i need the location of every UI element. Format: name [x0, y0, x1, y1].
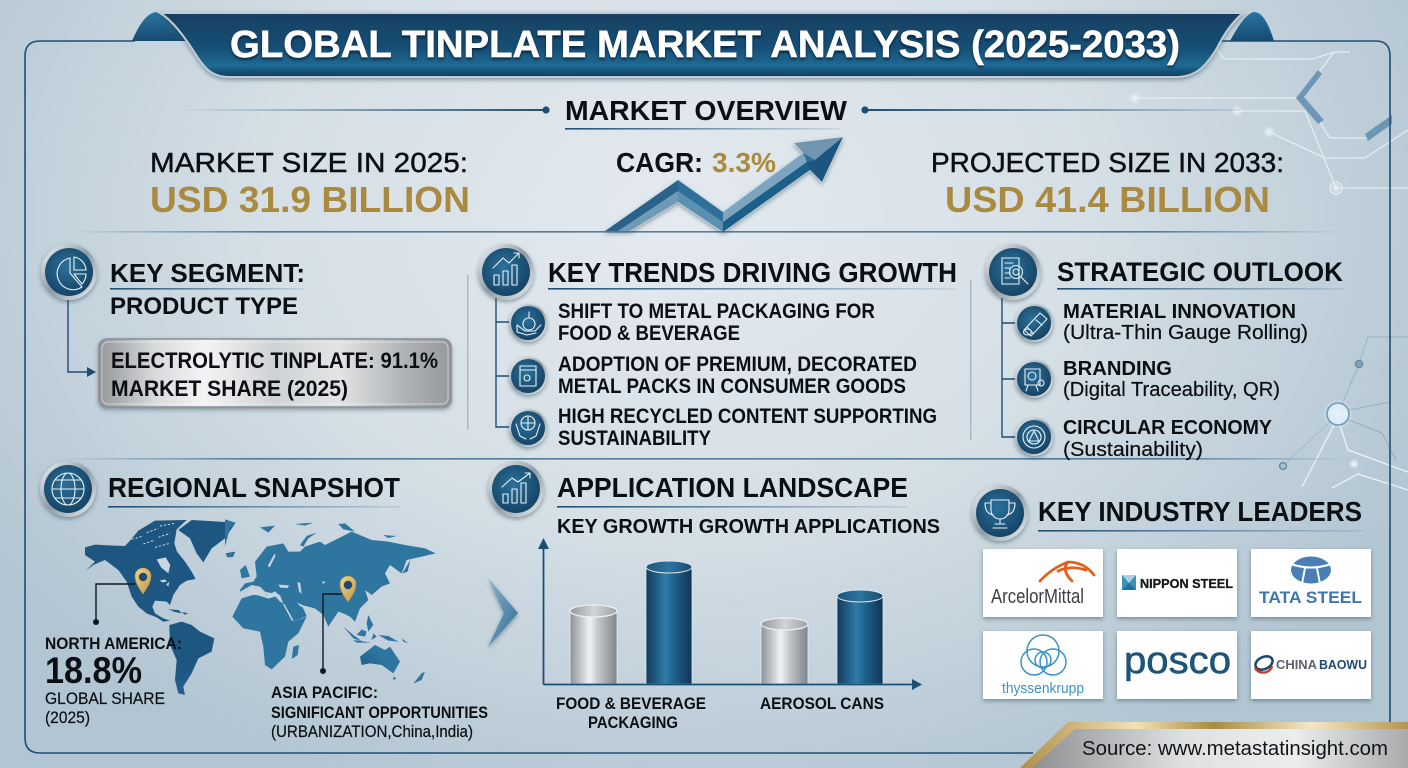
americas and greenland	[85, 520, 236, 695]
arrow: chevron to application panel	[488, 578, 518, 647]
trend text 1: SHIFT TO METAL PACKAGING FOR	[558, 300, 875, 323]
icon: recycling globe in hands	[509, 409, 547, 447]
trend text 3: SUSTAINABILITY	[558, 427, 711, 450]
icon: brand seal	[1015, 360, 1053, 398]
bar: aerosol blue	[837, 590, 883, 684]
logo: Nippon Steel	[1117, 549, 1237, 617]
north america stat: GLOBAL SHARE	[45, 689, 165, 708]
trend text 3	[558, 405, 937, 450]
heading: key segment: KEY SEGMENT:	[110, 258, 305, 288]
stat: projected size 2033	[931, 147, 1284, 220]
panel: key segment	[41, 244, 451, 407]
seas: mediterranean, black, caspian, red, gulf, baltic	[245, 554, 326, 621]
subheading: KEY GROWTH GROWTH APPLICATIONS	[557, 516, 940, 538]
logo: ArcelorMittal	[983, 549, 1103, 617]
icon: decorated pack	[509, 357, 547, 395]
subheading: product type: PRODUCT TYPE	[110, 293, 298, 320]
market overview heading	[180, 95, 1240, 130]
asia pacific stat: SIGNIFICANT OPPORTUNITIES	[271, 703, 488, 722]
logo: thyssenkrupp: thyssenkrupp	[1002, 680, 1084, 697]
asia pacific stat: (URBANIZATION,China,India)	[271, 722, 473, 741]
north america stat: (2025)	[45, 708, 90, 727]
bar: food blue	[646, 561, 692, 684]
outlook text: circular economy: (Sustainability)	[1063, 439, 1203, 461]
logo: Tata Steel	[1251, 549, 1371, 617]
source bar	[1020, 722, 1408, 768]
world map	[85, 519, 436, 695]
title: GLOBAL TINPLATE MARKET ANALYSIS (2025-2033)	[230, 24, 1180, 66]
logo: Tata Steel: TATA STEEL	[1259, 588, 1362, 607]
outlook text: material innovation: (Ultra-Thin Gauge Rolling)	[1063, 322, 1308, 344]
eurasia, africa and oceania	[225, 519, 436, 683]
trend text 3: HIGH RECYCLED CONTENT SUPPORTING	[558, 405, 937, 428]
logo: POSCO: posco	[1124, 640, 1231, 682]
outlook text: material innovation: MATERIAL INNOVATION	[1063, 301, 1296, 323]
icon: circular economy	[1015, 418, 1053, 456]
callout line: north america	[93, 584, 135, 625]
trend text 2: ADOPTION OF PREMIUM, DECORATED	[558, 353, 917, 376]
callout: electrolytic tinplate share	[99, 339, 451, 407]
heading: key trends: KEY TRENDS DRIVING GROWTH	[548, 257, 957, 288]
panel: strategic outlook	[985, 244, 1343, 461]
icon: pie chart	[41, 244, 97, 300]
callout: electrolytic tinplate share: MARKET SHARE (2025)	[111, 376, 348, 401]
tech network decoration: lower right	[1280, 337, 1408, 490]
north america stat	[45, 634, 182, 727]
trend text 1: FOOD & BEVERAGE	[558, 322, 740, 345]
bar labels: PACKAGING	[588, 713, 678, 732]
north america stat: 18.8%	[45, 650, 142, 691]
logo: China Baowu: BAOWU	[1319, 657, 1367, 672]
stat: projected size 2033: USD 41.4 BILLION	[945, 179, 1270, 220]
heading: strategic outlook: STRATEGIC OUTLOOK	[1057, 257, 1343, 287]
logo: POSCO	[1117, 631, 1237, 699]
bar labels: FOOD & BEVERAGE	[556, 694, 706, 713]
trend text 2	[558, 353, 917, 398]
icon: document with magnifier	[985, 244, 1041, 300]
logo: ArcelorMittal: ArcelorMittal	[991, 586, 1084, 608]
market overview heading: MARKET OVERVIEW	[565, 95, 848, 126]
bar chart	[538, 538, 922, 732]
icon: trophy	[972, 485, 1028, 541]
heading: regional snapshot: REGIONAL SNAPSHOT	[108, 472, 400, 503]
panel: key trends	[478, 244, 957, 450]
bar labels	[556, 694, 884, 732]
logo: China Baowu	[1251, 631, 1371, 699]
outlook text: branding	[1063, 358, 1280, 401]
asia pacific stat: ASIA PACIFIC:	[271, 683, 378, 702]
title banner	[132, 12, 1274, 77]
icon: growth chart	[478, 244, 534, 300]
outlook text: branding: BRANDING	[1063, 358, 1172, 380]
panel: application landscape	[488, 461, 940, 732]
heading: application landscape: APPLICATION LANDSCAPE	[557, 472, 908, 503]
arctic channels	[132, 523, 175, 547]
stat: market size 2025: MARKET SIZE IN 2025:	[150, 147, 468, 178]
callout line: asia pacific	[320, 594, 342, 674]
trend text 1	[558, 300, 875, 345]
chart axes	[538, 538, 922, 690]
stat: CAGR: 3.3%	[712, 147, 776, 178]
bar: food silver	[570, 605, 617, 684]
icon: globe	[40, 461, 96, 517]
logo: Nippon Steel: NIPPON STEEL	[1140, 576, 1233, 591]
icon: location pin asia pacific	[340, 576, 356, 602]
north america stat: NORTH AMERICA:	[45, 634, 182, 653]
panel: regional snapshot	[40, 461, 488, 741]
outlook text: circular economy: CIRCULAR ECONOMY	[1063, 417, 1273, 439]
bar labels: AEROSOL CANS	[760, 694, 884, 713]
logo: China Baowu: CHINA	[1276, 657, 1318, 672]
outlook text: circular economy	[1063, 417, 1273, 461]
seas: hudson bay and great lakes	[157, 557, 170, 587]
tech network decoration: top right	[1129, 48, 1408, 194]
bar: aerosol silver	[761, 618, 808, 684]
stat: projected size 2033: PROJECTED SIZE IN 2033:	[931, 147, 1284, 178]
source text: Source: www.metastatinsight.com	[1082, 737, 1388, 760]
stat: CAGR: CAGR:	[616, 147, 703, 178]
icon: growth bars	[488, 461, 544, 517]
trend text 2: METAL PACKS IN CONSUMER GOODS	[558, 375, 906, 398]
stat: CAGR	[616, 147, 776, 178]
panel: key industry leaders	[972, 485, 1371, 699]
stat: market size 2025: USD 31.9 BILLION	[150, 179, 470, 220]
growth arrow	[605, 137, 843, 232]
outlook text: material innovation	[1063, 301, 1308, 344]
callout: electrolytic tinplate share: ELECTROLYTIC TINPLATE: 91.1%	[111, 348, 438, 373]
heading: key industry leaders: KEY INDUSTRY LEADERS	[1038, 496, 1362, 527]
asia pacific stat	[271, 683, 488, 741]
icon: location pin north america	[135, 568, 151, 594]
stat: market size 2025	[150, 147, 470, 220]
icon: hand with apple	[509, 304, 547, 342]
outlook text: branding: (Digital Traceability, QR)	[1063, 379, 1280, 401]
icon: metal coil	[1015, 304, 1053, 342]
logo: thyssenkrupp	[983, 631, 1103, 699]
